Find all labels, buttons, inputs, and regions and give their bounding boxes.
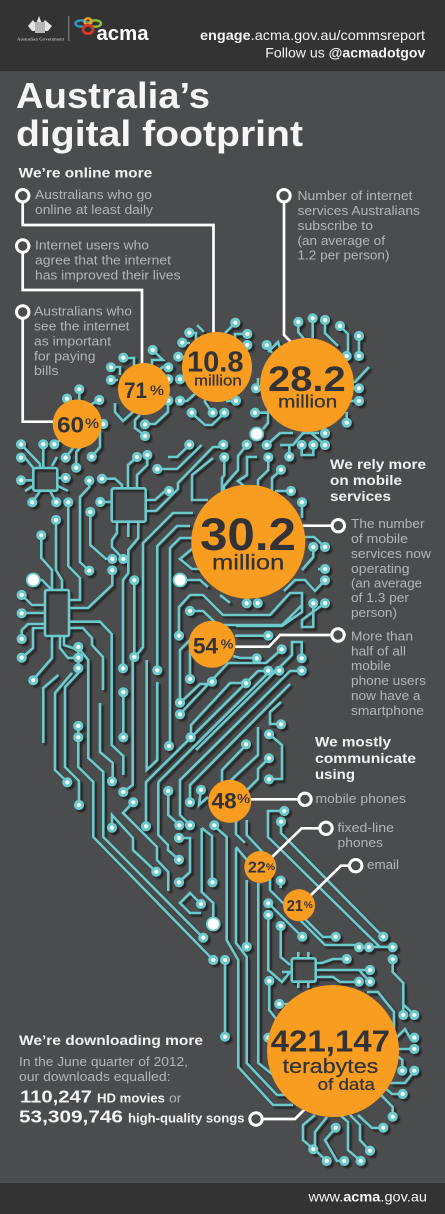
downloads: songs: 53,309,746 bbox=[19, 1106, 123, 1126]
callout: go online daily: Australians who go bbox=[35, 187, 152, 202]
callout: fixed-line phones: fixed-line bbox=[338, 820, 394, 835]
stat: 71% bbox=[118, 363, 170, 415]
callout: internet services: 1.2 per person) bbox=[298, 248, 390, 262]
callout: smartphone: half of all bbox=[351, 644, 406, 658]
stat: 10.8 million: 10.8 bbox=[187, 347, 244, 379]
callout: internet improved lives: Internet users who bbox=[35, 238, 149, 253]
downloads: movies bbox=[20, 1086, 182, 1106]
logo: acma bbox=[76, 18, 149, 45]
downloads: songs: high-quality songs bbox=[128, 1110, 244, 1125]
stat: 421,147 terabytes bbox=[267, 985, 399, 1117]
callout: smartphone bbox=[230, 629, 426, 718]
footer band bbox=[0, 1183, 445, 1214]
callout: internet services: services Australians bbox=[298, 203, 420, 218]
callout: paying bills: as important bbox=[34, 334, 111, 349]
callout: internet improved lives: agree that the internet bbox=[35, 253, 171, 268]
callout: smartphone: phone users bbox=[351, 673, 426, 688]
callout: fixed-line phones bbox=[270, 820, 394, 859]
callout: mobile services operating: operating bbox=[351, 561, 410, 576]
header band bbox=[0, 0, 445, 71]
stat: 30.2 million: 30.2 bbox=[200, 509, 296, 560]
trace shadows bbox=[23, 320, 417, 1163]
callout: go online daily bbox=[16, 187, 214, 335]
stat: 10.8 million bbox=[182, 332, 252, 402]
circuit traces bbox=[21, 318, 414, 1161]
logo: acma: acma bbox=[96, 23, 149, 45]
title bbox=[16, 75, 303, 154]
title: digital footprint bbox=[16, 113, 303, 154]
stat: 60% bbox=[53, 400, 102, 448]
stat: 21%: 21 bbox=[287, 898, 303, 915]
header links: engage.acma.gov.au/commsreport bbox=[200, 28, 425, 43]
stat: 22% bbox=[244, 851, 276, 883]
callout: email: email bbox=[367, 857, 399, 872]
callout: mobile services operating: (an average bbox=[351, 576, 422, 590]
section: communication: using bbox=[315, 767, 355, 783]
section: mobile services bbox=[230, 457, 432, 718]
stat: 22%: 22 bbox=[248, 860, 266, 877]
callout: paying bills: see the internet bbox=[34, 319, 130, 334]
callout: smartphone: mobile bbox=[351, 658, 391, 673]
footer band: www.acma.gov.au bbox=[307, 1190, 427, 1205]
stat: 21% bbox=[283, 889, 315, 921]
logo: Australian Government crest bbox=[17, 16, 65, 42]
callout: smartphone: More than bbox=[351, 629, 413, 644]
stat: 48%: 48 bbox=[212, 788, 237, 813]
callout: internet services bbox=[278, 188, 420, 342]
stat: 22%: % bbox=[266, 862, 276, 873]
callout: mobile services operating: of mobile bbox=[351, 531, 408, 546]
section: we're online more bbox=[16, 166, 420, 422]
circuit board footprint bbox=[21, 318, 417, 1163]
stat: 28.2 million bbox=[260, 338, 354, 432]
callout: mobile services operating bbox=[300, 516, 432, 620]
stat: 54%: % bbox=[221, 636, 234, 651]
callout: smartphone: smartphone bbox=[351, 703, 424, 718]
stat: 60%: % bbox=[85, 416, 99, 431]
callout: internet services: subscribe to bbox=[298, 218, 373, 233]
section: downloading more: our downloads equalled: bbox=[19, 1069, 170, 1084]
section: communication: We mostly bbox=[315, 735, 391, 751]
callout: mobile services operating: The number bbox=[351, 516, 425, 531]
stat: 421,147 terabytes: of data bbox=[318, 1076, 376, 1094]
stat: 421,147 terabytes: terabytes bbox=[283, 1056, 378, 1078]
stat: 421,147 terabytes: 421,147 bbox=[271, 1024, 390, 1059]
circuit nodes bbox=[21, 318, 414, 1161]
section: mobile services: services bbox=[330, 489, 391, 505]
callout: email bbox=[310, 857, 399, 896]
callout: paying bills: for paying bbox=[34, 349, 96, 364]
callout: fixed-line phones: phones bbox=[338, 835, 383, 850]
callout: paying bills: Australians who bbox=[34, 304, 132, 319]
stat: 54%: 54 bbox=[193, 633, 219, 658]
section: downloading more bbox=[19, 1033, 306, 1126]
stat: 28.2 million: million bbox=[278, 392, 337, 412]
stat: 30.2 million: million bbox=[212, 551, 284, 574]
logo: Australian Government crest: Australian Government bbox=[17, 36, 65, 42]
section: downloading more: In the June quarter of 2012, bbox=[19, 1054, 188, 1069]
downloads: movies: or bbox=[169, 1090, 182, 1105]
section: communication bbox=[245, 735, 416, 896]
callout: go online daily: online at least daily bbox=[35, 202, 153, 217]
title: Australia’s bbox=[16, 75, 210, 116]
stat: 21%: % bbox=[304, 900, 313, 911]
callout: mobile services operating: services now bbox=[351, 546, 432, 561]
stat: 71%: 71 bbox=[124, 378, 147, 403]
downloads: movies: HD movies bbox=[97, 1090, 165, 1105]
callout: mobile services operating: of 1.3 per bbox=[351, 590, 410, 605]
callout: mobile phones bbox=[245, 791, 406, 806]
stat: 71%: % bbox=[150, 382, 164, 398]
callout: mobile phones: mobile phones bbox=[316, 791, 406, 806]
stat: 54% bbox=[188, 621, 236, 668]
stat: 10.8 million: million bbox=[194, 373, 242, 389]
section: communication: communicate bbox=[315, 751, 416, 767]
callout: internet improved lives: has improved their lives bbox=[35, 268, 181, 282]
downloads: movies: 110,247 bbox=[20, 1086, 92, 1106]
stat: 60%: 60 bbox=[57, 413, 84, 438]
callout: internet services: Number of internet bbox=[298, 188, 413, 203]
section: downloading more: We’re downloading more bbox=[19, 1033, 203, 1049]
section: mobile services: We rely more bbox=[330, 457, 426, 473]
stat: 48%: % bbox=[237, 791, 250, 806]
stat: 30.2 million bbox=[191, 485, 305, 599]
downloads: songs bbox=[19, 1106, 306, 1126]
callout: paying bills bbox=[16, 304, 132, 422]
callout: paying bills: bills bbox=[34, 363, 59, 378]
header links: Follow us @acmadotgov bbox=[265, 46, 426, 61]
stat: 28.2 million: 28.2 bbox=[268, 359, 346, 399]
section: we're online more: We’re online more bbox=[19, 166, 152, 182]
callout: internet services: (an average of bbox=[298, 233, 385, 248]
callout: mobile services operating: person) bbox=[351, 605, 397, 620]
callout: internet improved lives bbox=[16, 238, 181, 365]
header links bbox=[200, 28, 426, 61]
stat: 48% bbox=[208, 780, 251, 823]
section: mobile services: on mobile bbox=[330, 473, 402, 489]
callout: smartphone: now have a bbox=[351, 688, 421, 703]
